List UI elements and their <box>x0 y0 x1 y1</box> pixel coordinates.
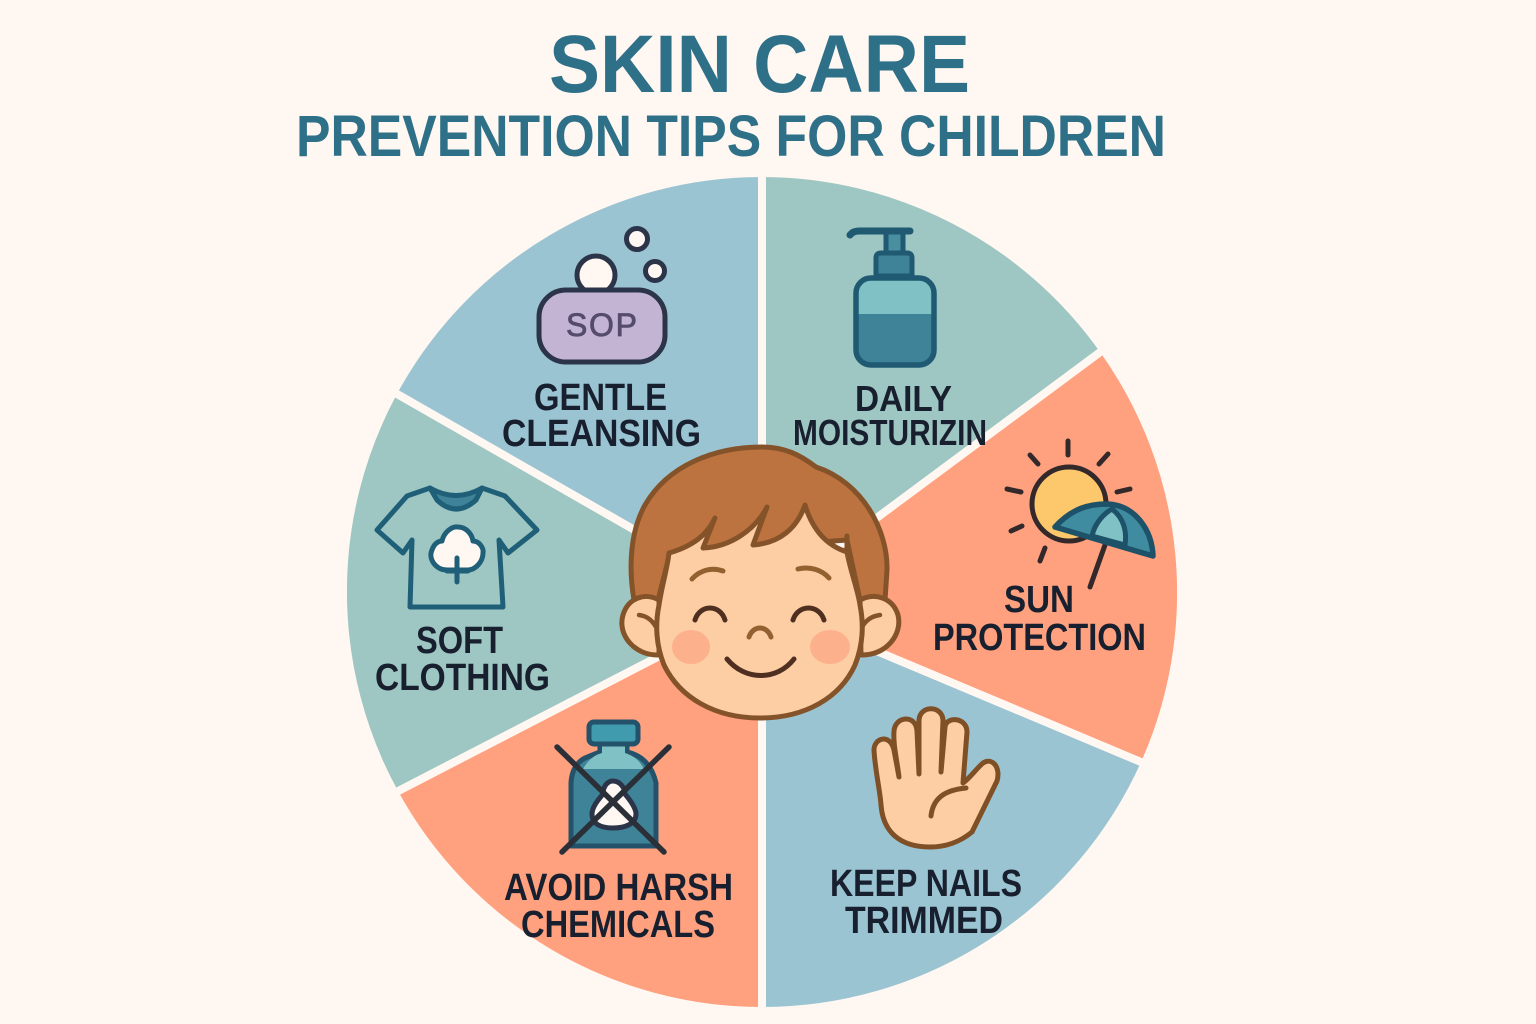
label: sun protection: SUN <box>1004 579 1074 621</box>
nose <box>749 628 771 637</box>
icon: soap bar with bubbles: SOP <box>566 307 637 343</box>
label: gentle cleansing <box>502 377 701 455</box>
label: keep nails trimmed <box>830 863 1022 942</box>
panel: avoid harsh chemicals <box>394 603 762 1011</box>
eyes <box>695 608 824 620</box>
label: soft clothing <box>375 620 550 699</box>
icon: sun and umbrella <box>1007 441 1153 587</box>
icon: smiling child face <box>622 447 899 718</box>
label: sun protection: PROTECTION <box>933 617 1146 659</box>
label: daily moisturizing: DAILY <box>855 378 952 419</box>
title <box>296 19 1166 169</box>
panel: soft clothing <box>343 392 762 793</box>
label: gentle cleansing: GENTLE <box>534 377 667 419</box>
label: gentle cleansing: CLEANSING <box>502 413 701 455</box>
cheeks <box>672 630 710 664</box>
title: PREVENTION TIPS FOR CHILDREN <box>296 104 1166 169</box>
panel: gentle cleansing <box>394 173 762 603</box>
panel: daily moisturizing <box>762 173 1103 603</box>
icon: open hand <box>874 709 998 847</box>
right ear <box>860 596 899 655</box>
hair <box>631 447 887 600</box>
panel: sun protection <box>762 350 1181 764</box>
label: avoid harsh chemicals: AVOID HARSH <box>504 867 733 909</box>
label: keep nails trimmed: KEEP NAILS <box>830 863 1022 905</box>
title: SKIN CARE <box>549 19 970 110</box>
label: keep nails trimmed: TRIMMED <box>845 900 1003 942</box>
icon: soap bar with bubbles <box>539 228 665 362</box>
label: avoid harsh chemicals: CHEMICALS <box>521 904 715 946</box>
label: daily moisturizing <box>793 378 987 453</box>
label: soft clothing: SOFT <box>416 620 503 662</box>
left ear <box>622 596 659 655</box>
label: daily moisturizing: MOISTURIZIN <box>793 412 987 453</box>
label: avoid harsh chemicals <box>504 867 733 946</box>
mouth <box>727 659 794 676</box>
brows <box>692 568 829 579</box>
face <box>657 505 862 718</box>
icon: pump bottle <box>850 231 934 365</box>
icon: crossed-out chemical bottle <box>557 722 669 852</box>
label: soft clothing: CLOTHING <box>375 657 550 699</box>
icon: t-shirt with cotton <box>377 488 537 607</box>
label: sun protection <box>933 579 1146 659</box>
panel: keep nails trimmed <box>762 603 1145 1011</box>
